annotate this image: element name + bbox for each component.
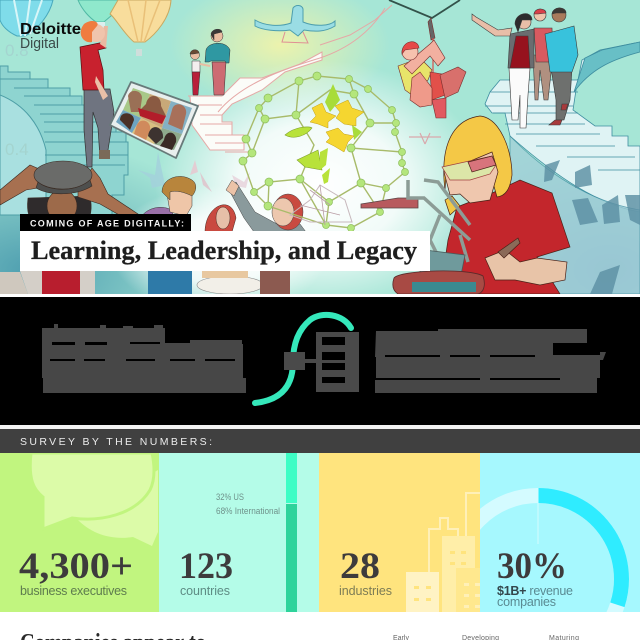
- left staircase: [0, 66, 128, 215]
- panel: industries: industries: [339, 584, 392, 598]
- panel: industries: [319, 453, 480, 612]
- icon: speech bubbles: [30, 453, 158, 546]
- centre pink staircase: [188, 5, 392, 152]
- panel: business executives: [0, 453, 159, 612]
- scale numbers: 0.4: [5, 140, 29, 159]
- panel: industries: 28: [340, 546, 380, 587]
- woman in red shirt on stairs: [80, 21, 114, 167]
- panel: revenue companies: companies: [497, 595, 556, 609]
- title: [20, 231, 430, 271]
- panel: black summary band: [0, 297, 640, 425]
- panel: countries: 68% International: [216, 506, 280, 516]
- man with glasses: [144, 176, 196, 214]
- illustration background: [0, 0, 640, 294]
- woman with goggles building robot: [440, 116, 570, 294]
- hot air balloons: [0, 0, 171, 56]
- illegible summary text, right block: [375, 329, 606, 393]
- man and child on stairs: [190, 29, 230, 95]
- panel: revenue companies: 30%: [497, 546, 567, 587]
- panel: countries: countries: [180, 584, 230, 598]
- right staircase: [485, 42, 640, 294]
- separator line: [0, 294, 640, 297]
- icon: city buildings: [406, 493, 480, 612]
- panel: business executives: business executives: [20, 584, 127, 598]
- panel: countries: 32% US: [216, 492, 244, 502]
- donut chart: 30 percent: [480, 488, 629, 612]
- three people walking down the stairs: [472, 8, 578, 128]
- butterflies: [138, 152, 250, 192]
- person raising a hand: [226, 180, 306, 232]
- robot arm: [361, 180, 484, 294]
- section heading band: SURVEY BY THE NUMBERS:: [20, 436, 214, 448]
- section heading band: [0, 429, 640, 453]
- panel: revenue companies: $1B+ revenue: [497, 584, 573, 598]
- zip wire: [389, 0, 460, 18]
- geodesic dome with flowers: [239, 72, 408, 232]
- scale numbers: [6, 44, 28, 155]
- figures below the title: [0, 271, 290, 294]
- icon: teal curve with ladder chart: [255, 315, 359, 403]
- person putting on VR headset: [0, 160, 138, 214]
- eyebrow label: [20, 214, 191, 232]
- graduation caps and butterflies: [544, 160, 640, 294]
- logo: Deloitte Digital: [20, 21, 81, 52]
- illegible summary text, left block: [42, 324, 246, 393]
- panel: revenue companies: [480, 453, 640, 612]
- eyebrow label: COMING OF AGE DIGITALLY:: [30, 218, 184, 228]
- logo: Deloitte Digital: Deloitte: [20, 21, 81, 38]
- separator line: [0, 425, 640, 429]
- logo: Deloitte Digital: Digital: [20, 35, 59, 52]
- small drone at right of dome: [409, 133, 441, 144]
- panel: business executives: 4,300+: [19, 546, 133, 587]
- tablet showing video call: [110, 82, 198, 158]
- panel: countries: [159, 453, 319, 612]
- hero illustration: [0, 0, 640, 294]
- scale numbers: 0.8: [5, 41, 29, 60]
- title: Learning, Leadership, and Legacy: [31, 236, 417, 265]
- drone: [255, 5, 335, 43]
- maturity column labels: [393, 635, 579, 640]
- woman with red hair, seen from the side: [205, 205, 236, 232]
- bar: US and international split: [286, 453, 297, 612]
- zip-lining person: [398, 18, 466, 118]
- panel: countries: 123: [179, 546, 233, 587]
